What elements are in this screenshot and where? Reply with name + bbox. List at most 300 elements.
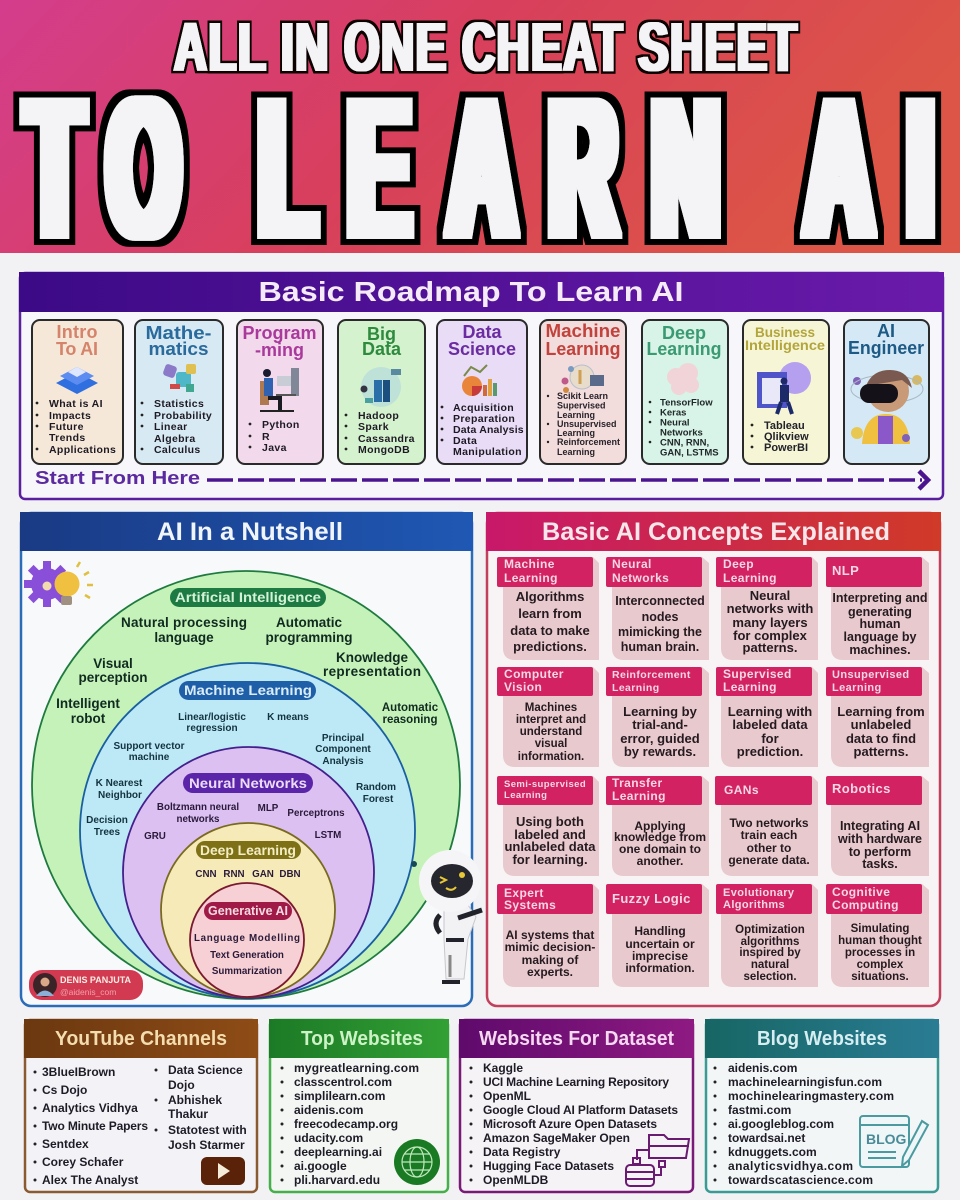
- concept: deep learning: Neural: [750, 588, 790, 603]
- card: big data: MongoDB: [358, 444, 410, 456]
- panel: blog websites: mochinelearingmastery.com: [728, 1089, 894, 1103]
- concept: evolutionary algorithms: natural: [751, 959, 789, 971]
- card: deep learning: [642, 320, 728, 464]
- card: mathematics: Calculus: [154, 444, 201, 456]
- icon: folder and database: [626, 1135, 689, 1186]
- nutshell heading: [20, 512, 473, 551]
- concept: nlp: [826, 557, 929, 660]
- circle: artificial intelligence: Intelligent: [56, 696, 120, 711]
- card: machine learning: Unsupervised: [557, 419, 617, 429]
- circle: machine learning: machine: [129, 752, 170, 763]
- circle: neural networks: networks: [176, 814, 220, 825]
- card: intro to ai: Intro: [56, 322, 98, 342]
- youtube heading: [24, 1019, 258, 1058]
- circle: artificial intelligence: Automatic: [382, 702, 439, 714]
- concept: machine learning: [497, 557, 599, 660]
- circle: artificial intelligence: robot: [71, 711, 106, 726]
- panel: top websites: deeplearning.ai: [294, 1145, 382, 1159]
- concept: supervised learning: Supervised: [723, 667, 792, 681]
- circle: machine learning: Random: [356, 782, 396, 793]
- card: machine learning: Learning: [557, 447, 595, 457]
- concept: transfer learning: another.: [637, 854, 683, 868]
- icon: data server cluster: [360, 367, 401, 407]
- circle: machine learning: K Nearest: [96, 778, 143, 789]
- panel: blog websites: towardsai.net: [728, 1131, 805, 1145]
- concept: machine learning: predictions.: [513, 639, 587, 654]
- card: data science: Data: [453, 435, 477, 447]
- card: intro to ai: Impacts: [49, 410, 91, 422]
- concept: gans: other to: [747, 841, 791, 855]
- icon: ml brain: [562, 365, 604, 393]
- concept: nlp: human: [860, 617, 900, 631]
- icon: brain: [667, 363, 699, 395]
- concept: computer vision: information.: [518, 751, 584, 763]
- circle: artificial intelligence: Knowledge: [336, 650, 408, 665]
- panel: youtube channels: Abhishek: [168, 1093, 222, 1107]
- concept: robotics: to perform: [849, 845, 911, 859]
- panel: top websites: aidenis.com: [294, 1103, 363, 1117]
- panel: youtube channels: Corey Schafer: [42, 1155, 124, 1169]
- card: deep learning: Learning: [646, 339, 722, 359]
- concept: reinforcement learning: Reinforcement: [612, 669, 691, 681]
- concept: reinforcement learning: trial-and-: [632, 717, 688, 732]
- start from here label: Start From Here: [35, 468, 200, 488]
- panel: blog websites: [705, 1019, 939, 1192]
- concept: cognitive computing: Cognitive: [832, 885, 890, 899]
- circle: artificial intelligence: Natural processing: [121, 615, 247, 630]
- icon: blog page and pencil: [860, 1116, 928, 1167]
- card: machine learning: Reinforcement: [557, 437, 620, 447]
- panel: top websites: simplilearn.com: [294, 1089, 385, 1103]
- concept: nlp: NLP: [832, 563, 859, 578]
- concept: supervised learning: labeled data: [732, 717, 808, 732]
- concept: semi-supervised learning: [497, 776, 599, 876]
- concept: supervised learning: Learning: [723, 680, 777, 694]
- main title: to learn ai: TO LEARN AI: [26, 58, 933, 278]
- card: business intelligence: Business: [755, 324, 815, 340]
- panel: top websites: mygreatlearning.com: [294, 1061, 419, 1075]
- panel: websites for dataset: [459, 1019, 694, 1192]
- card: programming: -ming: [255, 340, 304, 360]
- card: data science: Science: [448, 339, 516, 359]
- panel: youtube channels: Sentdex: [42, 1137, 89, 1151]
- concept: cognitive computing: Computing: [832, 898, 899, 912]
- card: mathematics: matics: [148, 339, 208, 359]
- panel: basic ai concepts: [486, 512, 941, 1006]
- panel: ai in a nutshell: [20, 512, 482, 1006]
- header banner: [0, 0, 960, 253]
- card: big data: Big: [367, 324, 396, 344]
- concept: gans: generate data.: [728, 853, 810, 867]
- concept: transfer learning: Learning: [612, 789, 666, 803]
- panel: youtube channels: 3BlueIBrown: [42, 1065, 115, 1079]
- concept: neural networks: Interconnected: [615, 594, 705, 608]
- card: deep learning: GAN, LSTMS: [660, 448, 719, 458]
- circle: machine learning: Linear/logistic: [178, 712, 246, 723]
- concept: fuzzy logic: imprecise: [632, 949, 688, 963]
- arrow: roadmap direction: [207, 471, 928, 489]
- icon: layered chip: [56, 367, 98, 394]
- blog heading: Blog Websites: [757, 1028, 887, 1050]
- concept: deep learning: networks with: [727, 601, 813, 616]
- card: mathematics: Probability: [154, 410, 212, 422]
- panel: youtube channels: Dojo: [168, 1078, 195, 1092]
- panel: youtube channels: Statotest with: [168, 1123, 247, 1137]
- card: data science: Acquisition: [453, 402, 514, 414]
- concept: semi-supervised learning: labeled and: [514, 827, 586, 842]
- circle: artificial intelligence: Automatic: [276, 615, 342, 630]
- circle: generative ai: Summarization: [212, 966, 282, 977]
- card: machine learning: Learning: [557, 410, 595, 420]
- icon: globe: [394, 1139, 440, 1185]
- concept: expert systems: mimic decision-: [505, 940, 595, 954]
- concept: machine learning: Machine: [504, 557, 555, 571]
- card: machine learning: Supervised: [557, 400, 606, 410]
- panel: websites for dataset: Microsoft Azure Open Datasets: [483, 1117, 657, 1131]
- concept: machine learning: data to make: [510, 623, 590, 638]
- concept: computer vision: Machines: [525, 702, 577, 714]
- concept: computer vision: visual: [535, 738, 567, 750]
- panel: youtube channels: Thakur: [168, 1107, 208, 1121]
- circle: artificial intelligence: perception: [78, 670, 148, 685]
- concept: expert systems: Expert: [504, 886, 544, 900]
- circle: artificial intelligence: programming: [265, 630, 353, 645]
- concept: nlp: machines.: [849, 643, 911, 657]
- card: business intelligence: PowerBI: [764, 442, 808, 454]
- concept: unsupervised learning: Unsupervised: [832, 669, 910, 681]
- circle: machine learning: regression: [186, 723, 238, 734]
- concept: expert systems: Systems: [504, 898, 556, 912]
- concept: unsupervised learning: patterns.: [854, 744, 908, 759]
- concepts heading: Basic AI Concepts Explained: [542, 518, 890, 546]
- card: programming: Python: [262, 419, 300, 431]
- concept: evolutionary algorithms: algorithms: [741, 936, 799, 948]
- concept: evolutionary algorithms: [716, 884, 818, 987]
- circle: deep learning: GAN: [252, 869, 274, 880]
- concept: deep learning: Deep: [723, 557, 754, 571]
- panel: blog websites: aidenis.com: [728, 1061, 797, 1075]
- concept: nlp: generating: [848, 605, 912, 619]
- panel: youtube channels: Analytics Vidhya: [42, 1101, 138, 1115]
- panel: youtube channels: Data Science: [168, 1063, 243, 1077]
- panel: websites for dataset: Data Registry: [483, 1145, 561, 1159]
- panel: youtube channels: Josh Starmer: [168, 1138, 245, 1152]
- concept: expert systems: AI systems that: [506, 928, 594, 942]
- card: intro to ai: Applications: [49, 444, 116, 456]
- concept: robotics: [826, 776, 929, 876]
- circle: generative ai: Language Modelling: [194, 933, 300, 944]
- panel: blog websites: ai.googleblog.com: [728, 1117, 834, 1131]
- concept: cognitive computing: Simulating: [851, 923, 909, 935]
- card: machine learning: Learning: [546, 339, 620, 359]
- card: deep learning: CNN, RNN,: [660, 438, 709, 448]
- circle: neural networks: GRU: [144, 831, 166, 842]
- concept: fuzzy logic: Handling: [634, 924, 686, 938]
- icon: charts: [462, 365, 497, 396]
- circle: neural networks: MLP: [258, 803, 279, 814]
- concept: reinforcement learning: [606, 667, 709, 767]
- card: big data: Cassandra: [358, 433, 415, 445]
- card: business intelligence: Tableau: [764, 420, 805, 432]
- card: ai engineer: [844, 320, 929, 464]
- circle: artificial intelligence: Visual: [93, 656, 133, 671]
- concept: computer vision: Vision: [504, 680, 542, 694]
- card: business intelligence: [743, 320, 829, 464]
- icon: analyst at dashboard: [757, 362, 811, 414]
- concept: expert systems: [497, 884, 599, 987]
- blog heading: [705, 1019, 939, 1058]
- icon: math symbols: [162, 363, 196, 392]
- card: intro to ai: [32, 320, 123, 464]
- concept: gans: train each: [741, 828, 797, 842]
- card: data science: Data Analysis: [453, 424, 524, 436]
- card: data science: Preparation: [453, 413, 515, 425]
- card: mathematics: Algebra: [154, 433, 196, 445]
- panel: blog websites: towardscatascience.com: [728, 1173, 873, 1187]
- concept: fuzzy logic: Fuzzy Logic: [612, 891, 691, 906]
- circle: neural networks: Neural Networks: [189, 776, 307, 791]
- card: intro to ai: Trends: [49, 432, 86, 444]
- circle: generative ai: Text Generation: [210, 950, 284, 961]
- card: ai engineer: AI: [877, 321, 895, 341]
- circle: neural networks: [123, 747, 374, 998]
- concept: transfer learning: one domain to: [619, 842, 701, 856]
- panel: top websites: [269, 1019, 449, 1192]
- card: machine learning: [540, 320, 626, 464]
- concepts heading: [486, 512, 941, 551]
- card: programming: Program: [242, 323, 317, 343]
- concept: evolutionary algorithms: inspired by: [739, 947, 801, 959]
- circle: machine learning: K means: [267, 712, 309, 723]
- concept: computer vision: [497, 667, 599, 767]
- card: programming: R: [262, 431, 270, 443]
- circle: machine learning: Trees: [94, 827, 121, 838]
- concept: cognitive computing: processes in: [845, 947, 915, 959]
- circle: machine learning: Component: [315, 744, 371, 755]
- panel: youtube channels: Alex The Analyst: [42, 1173, 138, 1187]
- panel: blog websites: fastmi.com: [728, 1103, 791, 1117]
- panel: websites for dataset: Amazon SageMaker Open: [483, 1131, 630, 1145]
- concept: deep learning: many layers: [732, 615, 808, 630]
- concept: supervised learning: prediction.: [737, 744, 803, 759]
- card: data science: Data: [462, 322, 502, 342]
- concept: semi-supervised learning: Semi-supervised: [504, 779, 586, 790]
- circle: artificial intelligence: reasoning: [383, 714, 437, 726]
- concept: reinforcement learning: Learning: [612, 682, 660, 694]
- concept: machine learning: Algorithms: [516, 589, 584, 604]
- circle: machine learning: Forest: [363, 794, 394, 805]
- panel: top websites: classcentrol.com: [294, 1075, 392, 1089]
- icon: robot mascot: [411, 850, 482, 982]
- concept: cognitive computing: human thought: [838, 935, 922, 947]
- circle: generative ai: [190, 883, 304, 997]
- concept: transfer learning: knowledge from: [614, 830, 706, 844]
- concept: robotics: Integrating AI: [840, 819, 920, 833]
- circle: deep learning: [161, 823, 335, 997]
- card: mathematics: Statistics: [154, 398, 204, 410]
- card: business intelligence: Intelligence: [745, 337, 825, 353]
- concept: transfer learning: [606, 776, 709, 876]
- concept: deep learning: [716, 557, 818, 660]
- concept: semi-supervised learning: Using both: [516, 814, 584, 829]
- concept: machine learning: Learning: [504, 571, 558, 585]
- author badge: [29, 970, 143, 1000]
- card: deep learning: Neural: [660, 418, 690, 428]
- panel: websites for dataset: OpenML: [483, 1089, 531, 1103]
- roadmap heading: Basic Roadmap To Learn AI: [258, 276, 684, 307]
- top websites heading: [269, 1019, 449, 1058]
- top websites heading: Top Websites: [301, 1028, 423, 1050]
- panel: top websites: freecodecamp.org: [294, 1117, 398, 1131]
- icon: gear and light bulb: [24, 561, 93, 607]
- concept: robotics: Robotics: [832, 781, 891, 796]
- concept: neural networks: human brain.: [621, 640, 699, 654]
- concept: expert systems: making of: [522, 953, 579, 967]
- circle: machine learning: [80, 663, 415, 998]
- card: machine learning: Learning: [557, 428, 595, 438]
- concept: reinforcement learning: by rewards.: [624, 744, 696, 759]
- icon: blog page and pencil: BLOG: [866, 1131, 907, 1147]
- concept: computer vision: interpret and: [516, 714, 586, 726]
- title line: all in one cheat sheet: ALL IN ONE CHEAT SHEET: [174, 8, 798, 86]
- panel: youtube channels: Two Minute Papers: [42, 1119, 148, 1133]
- circle: generative ai: Generative AI: [208, 904, 288, 918]
- dataset heading: [459, 1019, 694, 1058]
- circle: neural networks: Boltzmann neural: [157, 802, 239, 813]
- concept: nlp: Interpreting and: [832, 591, 928, 605]
- dataset heading: Websites For Dataset: [479, 1028, 674, 1050]
- concept: supervised learning: [716, 667, 818, 767]
- concept: deep learning: for complex: [733, 628, 808, 643]
- concept: gans: Two networks: [729, 816, 809, 830]
- circle: machine learning: Analysis: [322, 756, 364, 767]
- concept: evolutionary algorithms: selection.: [743, 971, 797, 983]
- concept: gans: GANs: [724, 783, 759, 797]
- card: programming: Java: [262, 442, 287, 454]
- circle: deep learning: CNN: [195, 869, 217, 880]
- card: deep learning: Keras: [660, 408, 686, 418]
- author badge: DENIS PANJUTA: [60, 975, 131, 986]
- concept: cognitive computing: [826, 884, 929, 987]
- circle: neural networks: LSTM: [315, 830, 341, 841]
- circle: artificial intelligence: representation: [323, 664, 421, 679]
- concept: evolutionary algorithms: Algorithms: [723, 899, 785, 911]
- concept: semi-supervised learning: unlabeled data: [504, 839, 596, 854]
- concept: unsupervised learning: unlabeled: [851, 717, 911, 732]
- card: machine learning: Machine: [546, 321, 620, 341]
- panel: websites for dataset: Google Cloud AI Platform Datasets: [483, 1103, 678, 1117]
- panel: youtube channels: Cs Dojo: [42, 1083, 87, 1097]
- panel: websites for dataset: OpenMLDB: [483, 1173, 549, 1187]
- concept: neural networks: Networks: [612, 571, 669, 585]
- concept: neural networks: mimicking the: [618, 625, 702, 639]
- icon: play button: [201, 1157, 245, 1185]
- circle: machine learning: Machine Learning: [184, 683, 312, 698]
- concept: supervised learning: Learning with: [728, 704, 812, 719]
- card: big data: Data: [362, 339, 402, 359]
- card: ai engineer: Engineer: [848, 338, 924, 358]
- circle: deep learning: Deep Learning: [200, 843, 296, 858]
- card: big data: Hadoop: [358, 410, 399, 422]
- card: deep learning: TensorFlow: [660, 398, 713, 408]
- circle: artificial intelligence: Artificial Intelligence: [175, 590, 322, 605]
- concept: computer vision: Computer: [504, 667, 564, 681]
- concept: computer vision: understand: [520, 726, 582, 738]
- concept: unsupervised learning: Learning: [832, 682, 882, 694]
- concept: unsupervised learning: Learning from: [837, 704, 925, 719]
- concept: gans: [715, 776, 818, 876]
- concept: neural networks: Neural: [612, 557, 652, 571]
- concept: deep learning: patterns.: [743, 640, 797, 655]
- card: data science: [437, 320, 527, 464]
- card: intro to ai: Future: [49, 421, 84, 433]
- concept: semi-supervised learning: for learning.: [512, 852, 588, 867]
- card: deep learning: Networks: [660, 428, 703, 438]
- concept: unsupervised learning: [826, 667, 929, 767]
- circle: neural networks: Perceptrons: [287, 808, 345, 819]
- panel: websites for dataset: Kaggle: [483, 1061, 523, 1075]
- panel: top websites: ai.google: [294, 1159, 347, 1173]
- concept: neural networks: nodes: [642, 610, 678, 624]
- circle: machine learning: Neighbor: [98, 790, 142, 801]
- card: intro to ai: To AI: [56, 339, 98, 359]
- concept: machine learning: learn from: [518, 606, 582, 621]
- concept: fuzzy logic: uncertain or: [625, 937, 695, 951]
- card: data science: Manipulation: [453, 446, 522, 458]
- icon: programmer at desk: [260, 368, 299, 411]
- panel: basic roadmap: [19, 272, 944, 499]
- concept: transfer learning: Applying: [634, 819, 686, 833]
- roadmap heading: [19, 272, 944, 312]
- card: mathematics: Mathe-: [146, 323, 212, 343]
- concept: reinforcement learning: Learning by: [623, 704, 698, 719]
- concept: cognitive computing: complex: [857, 959, 904, 971]
- panel: youtube channels: [24, 1019, 258, 1192]
- concept: reinforcement learning: error, guided: [620, 731, 700, 746]
- author badge: @aidenis_com: [60, 987, 116, 997]
- circle: artificial intelligence: [32, 571, 460, 999]
- card: mathematics: Linear: [154, 421, 188, 433]
- card: intro to ai: What is AI: [49, 398, 103, 410]
- panel: top websites: udacity.com: [294, 1131, 363, 1145]
- panel: blog websites: machinelearningisfun.com: [728, 1075, 882, 1089]
- circle: machine learning: Decision: [86, 815, 128, 826]
- concept: nlp: language by: [844, 630, 917, 644]
- circle: deep learning: RNN: [223, 869, 245, 880]
- card: mathematics: [135, 320, 223, 464]
- circle: machine learning: Principal: [322, 733, 364, 744]
- nutshell heading: AI In a Nutshell: [157, 518, 343, 546]
- panel: websites for dataset: Hugging Face Datasets: [483, 1159, 614, 1173]
- card: programming: [237, 320, 323, 464]
- concept: semi-supervised learning: Learning: [504, 790, 547, 801]
- concept: neural networks: [606, 557, 709, 660]
- panel: blog websites: analyticsvidhya.com: [728, 1159, 853, 1173]
- concept: evolutionary algorithms: Optimization: [735, 924, 805, 936]
- circle: deep learning: DBN: [279, 869, 301, 880]
- concept: unsupervised learning: data to find: [846, 731, 916, 746]
- card: deep learning: Deep: [662, 323, 706, 343]
- card: business intelligence: Qlikview: [764, 431, 809, 443]
- concept: fuzzy logic: [606, 884, 709, 987]
- panel: top websites: pli.harvard.edu: [294, 1173, 380, 1187]
- card: big data: [338, 320, 425, 464]
- card: big data: Spark: [358, 421, 389, 433]
- concept: deep learning: Learning: [723, 571, 777, 585]
- venn diagram: ai hierarchy: [32, 571, 460, 999]
- panel: websites for dataset: UCI Machine Learning Repository: [483, 1075, 669, 1089]
- concept: robotics: tasks.: [862, 857, 898, 871]
